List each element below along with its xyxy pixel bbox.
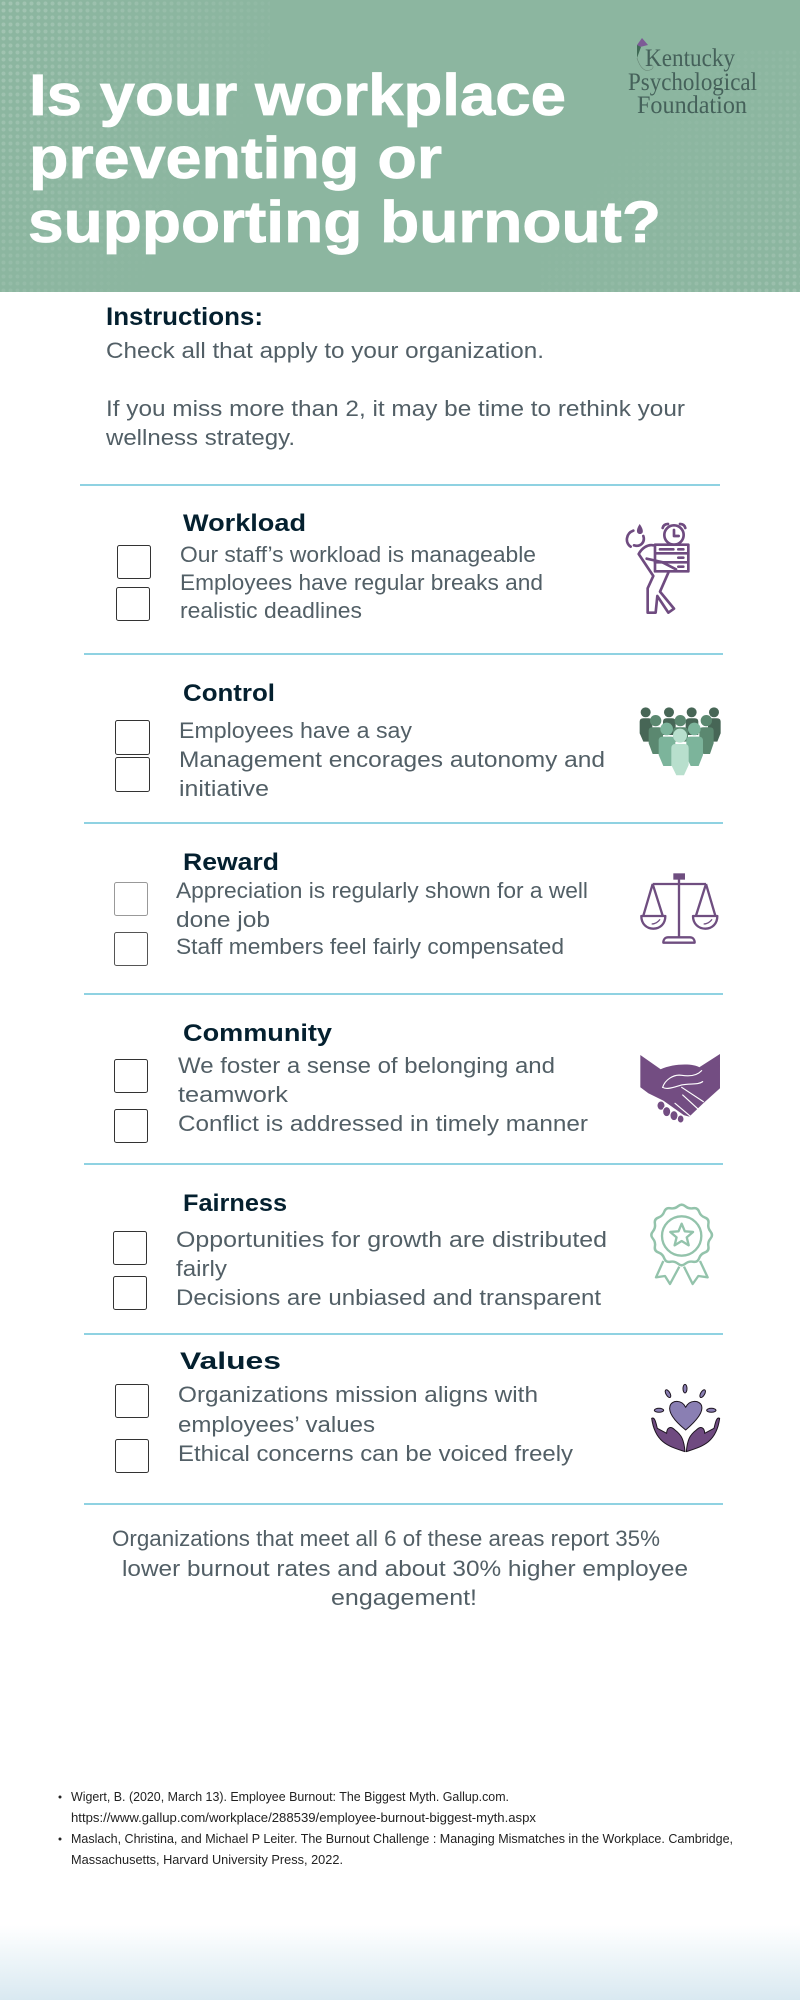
statements: control: initiative xyxy=(179,776,269,801)
title: Is your workplace xyxy=(29,63,566,128)
statements: workload xyxy=(180,542,543,623)
icon: hands holding heart xyxy=(652,1384,720,1452)
statements: community xyxy=(178,1053,589,1136)
heading: workload: Workload xyxy=(183,510,306,537)
statements: community: teamwork xyxy=(178,1082,289,1107)
closing statement xyxy=(112,1526,688,1610)
statements: values: Ethical concerns can be voiced freely xyxy=(178,1441,574,1466)
references xyxy=(58,1790,733,1867)
statements: fairness: Decisions are unbiased and transparent xyxy=(176,1285,602,1310)
instructions: Instructions: xyxy=(106,303,263,331)
logo: Kentucky Psychological Foundation: Psychological xyxy=(628,69,757,96)
statements: reward: done job xyxy=(176,907,270,932)
icon: handshake xyxy=(640,1054,720,1123)
icon: person carrying servers with clock xyxy=(627,524,688,613)
icon: group of people xyxy=(640,707,721,775)
references: https://www.gallup.com/workplace/288539/employee-burnout-biggest-myth.aspx xyxy=(71,1811,537,1825)
panel: fairness xyxy=(114,1190,712,1310)
title: preventing or xyxy=(29,126,442,191)
footer gradient band xyxy=(0,1925,800,2000)
statements: fairness: Opportunities for growth are distributed xyxy=(176,1227,607,1252)
panel: control xyxy=(116,680,721,801)
instructions: Check all that apply to your organization. xyxy=(106,338,544,363)
heading: community: Community xyxy=(183,1020,333,1047)
checkboxes: workload xyxy=(116,546,150,620)
panel: values xyxy=(116,1348,720,1472)
statements: values xyxy=(178,1382,574,1466)
panel: community xyxy=(114,1020,720,1142)
panel: workload xyxy=(116,510,688,623)
checkboxes: reward xyxy=(114,882,148,966)
instructions xyxy=(105,303,686,450)
statements: reward: Appreciation is regularly shown for a well xyxy=(176,878,588,903)
closing statement: lower burnout rates and about 30% higher employee xyxy=(122,1556,688,1581)
statements: control: Employees have a say xyxy=(179,718,413,743)
checkboxes: fairness xyxy=(114,1232,146,1310)
references: Maslach, Christina, and Michael P Leiter. The Burnout Challenge : Managing Mismatches in the Workplace. Cambridge, xyxy=(71,1832,733,1846)
statements: values: Organizations mission aligns with xyxy=(178,1382,538,1407)
statements: workload: Our staff’s workload is manageable xyxy=(180,542,536,567)
logo: Kentucky Psychological Foundation: Foundation xyxy=(637,92,747,119)
heading: fairness: Fairness xyxy=(183,1190,287,1217)
references: Massachusetts, Harvard University Press, 2022. xyxy=(71,1853,343,1867)
logo: Kentucky Psychological Foundation xyxy=(628,38,757,119)
statements: community: We foster a sense of belonging and xyxy=(178,1053,555,1078)
statements: fairness xyxy=(176,1227,607,1310)
statements: reward xyxy=(176,878,588,959)
statements: fairness: fairly xyxy=(176,1256,228,1281)
panel: reward xyxy=(114,849,717,966)
statements: reward: Staff members feel fairly compensated xyxy=(176,934,564,959)
statements: workload: realistic deadlines xyxy=(180,598,362,623)
title: supporting burnout? xyxy=(28,190,661,255)
instructions: If you miss more than 2, it may be time to rethink your xyxy=(106,396,686,421)
icon: balance scale xyxy=(641,873,717,943)
statements: workload: Employees have regular breaks and xyxy=(180,570,543,595)
references: Wigert, B. (2020, March 13). Employee Burnout: The Biggest Myth. Gallup.com. xyxy=(71,1790,509,1804)
heading: values: Values xyxy=(180,1348,281,1375)
statements: control: Management encorages autonomy and xyxy=(179,747,605,772)
logo: Kentucky Psychological Foundation: Kentucky xyxy=(645,45,735,72)
statements: control xyxy=(179,718,605,801)
checkboxes: control xyxy=(116,720,150,792)
statements: community: Conflict is addressed in timely manner xyxy=(178,1111,589,1136)
closing statement: engagement! xyxy=(331,1585,477,1610)
checkboxes: community xyxy=(114,1060,148,1142)
header banner xyxy=(0,0,800,292)
checkboxes: values xyxy=(116,1384,148,1472)
statements: values: employees’ values xyxy=(178,1412,375,1437)
closing statement: Organizations that meet all 6 of these areas report 35% xyxy=(112,1526,660,1551)
heading: control: Control xyxy=(183,680,275,707)
icon: award ribbon badge xyxy=(651,1205,712,1284)
title xyxy=(28,63,661,255)
heading: reward: Reward xyxy=(183,849,279,876)
instructions: wellness strategy. xyxy=(105,425,295,450)
